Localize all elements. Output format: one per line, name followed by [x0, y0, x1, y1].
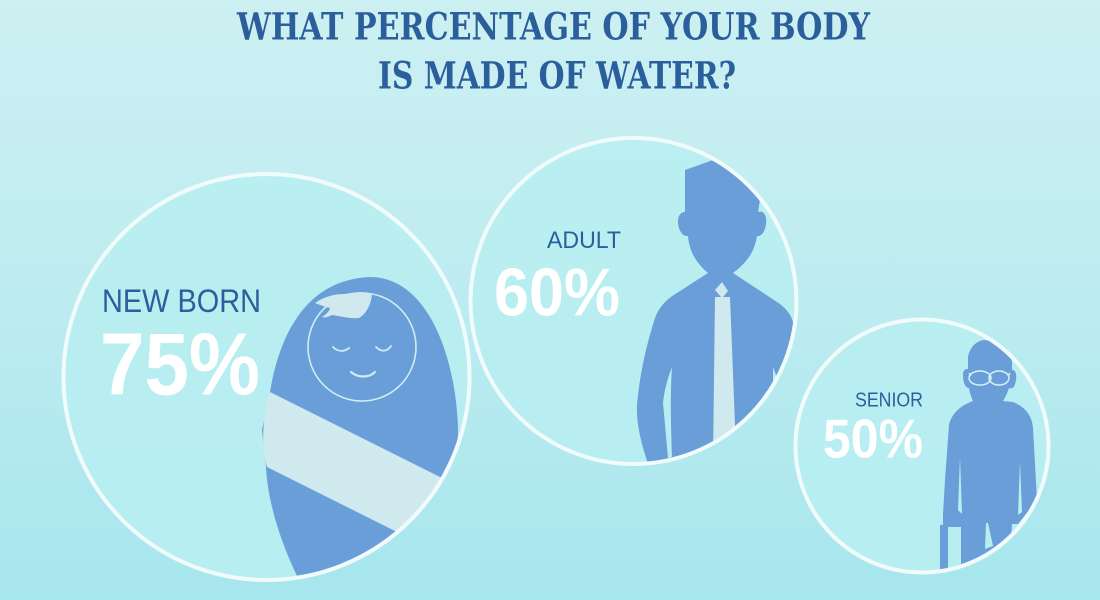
panel: adult: [470, 138, 796, 470]
circle outline: [64, 174, 470, 580]
icon: swaddled baby: [262, 277, 458, 578]
value: 75%: 75%: [100, 314, 260, 414]
title: WHAT PERCENTAGE OF YOUR BODY: [236, 4, 870, 48]
value: 60%: 60%: [494, 254, 620, 330]
title: [236, 4, 870, 98]
circle outline: [470, 138, 796, 464]
icon: adult silhouette: [637, 160, 794, 470]
circle outline: [796, 320, 1048, 572]
panel: senior: [796, 320, 1048, 572]
icon: senior silhouette: [940, 340, 1037, 570]
panel: new born: [64, 174, 470, 580]
label: new born: NEW BORN: [102, 283, 261, 319]
label: senior: SENIOR: [855, 388, 923, 412]
title: IS MADE OF WATER?: [378, 54, 736, 98]
cane: [940, 525, 948, 570]
value: 50%: 50%: [823, 408, 923, 470]
label: adult: ADULT: [547, 227, 621, 254]
